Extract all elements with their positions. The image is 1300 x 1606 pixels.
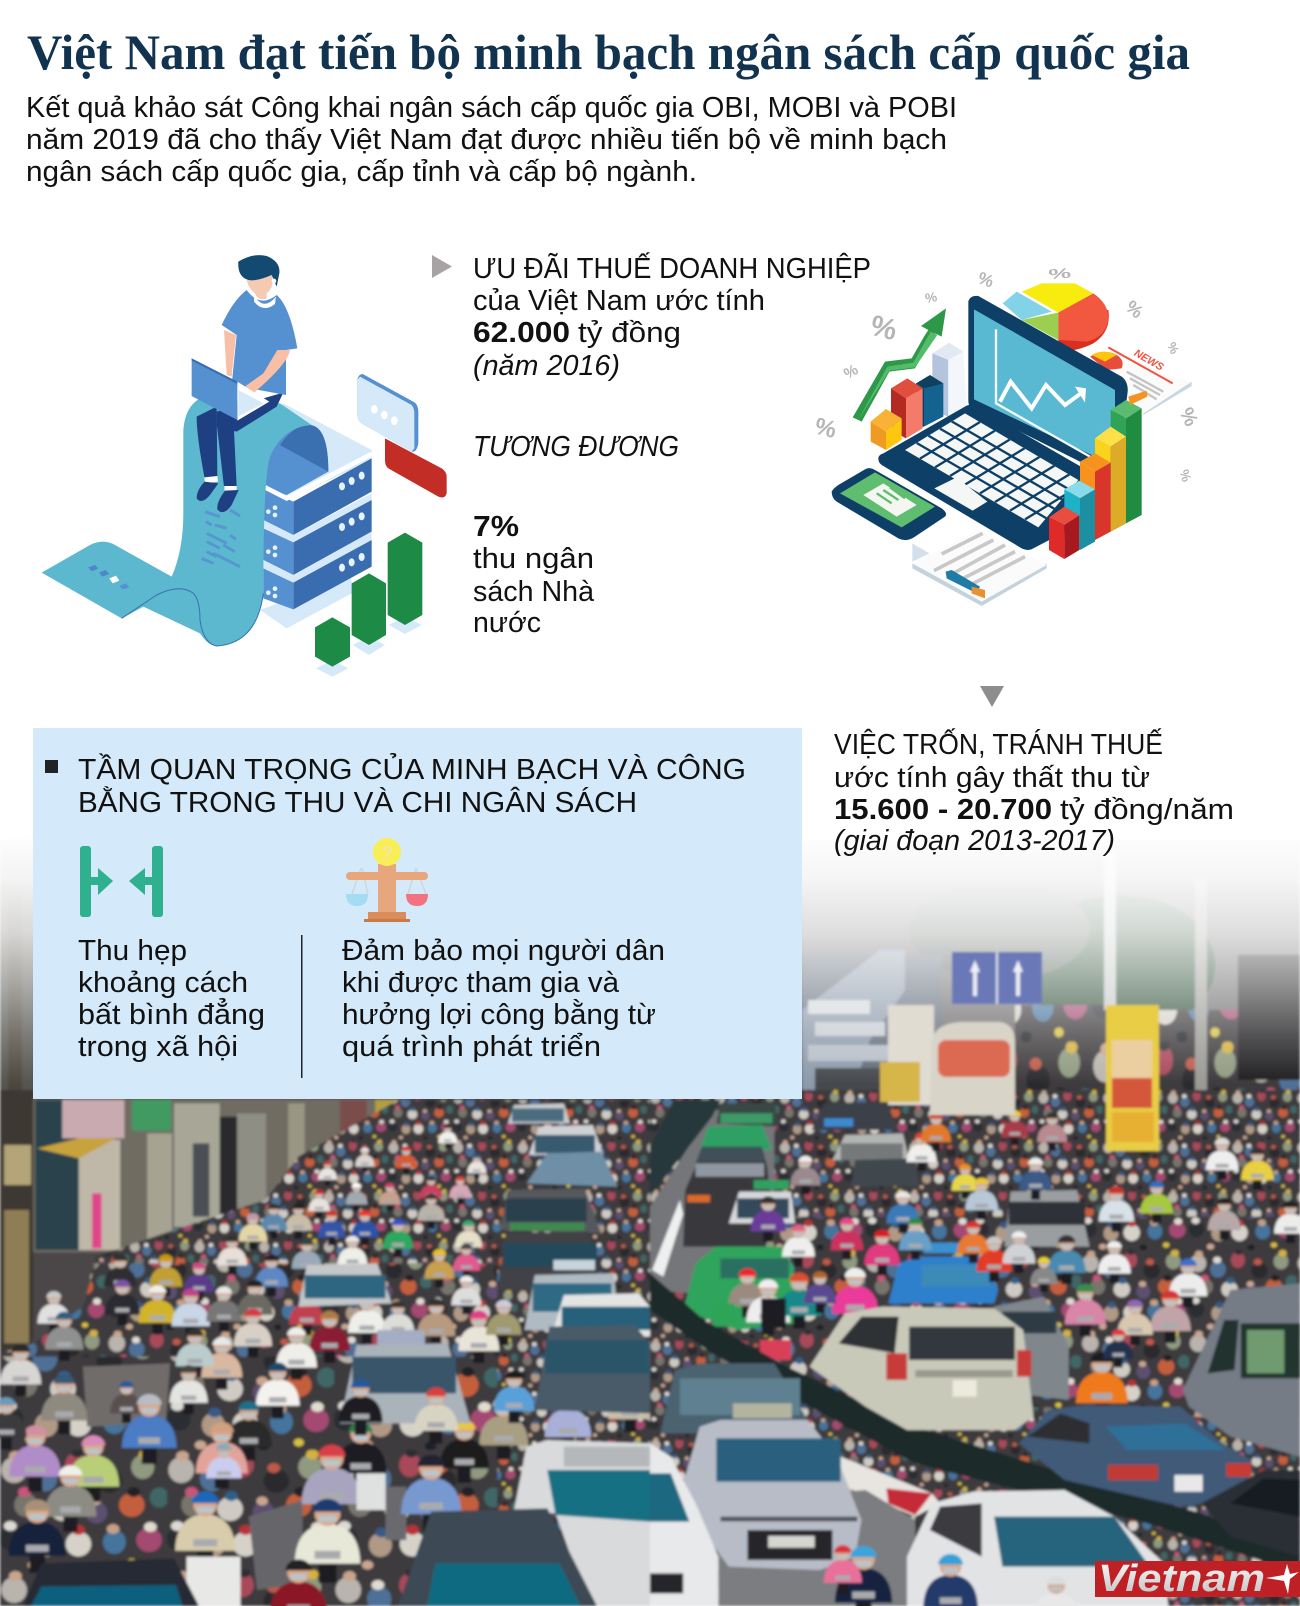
- text: fair participation: hưởng lợi công bằng từ: [342, 998, 656, 1031]
- text: fair participation: Đảm bảo mọi người dân: [342, 935, 665, 967]
- bars in front: [1049, 391, 1147, 559]
- pie chart and newspaper: [1003, 283, 1192, 415]
- paper roll: [42, 398, 312, 646]
- text block: corporate tax incentives: ƯU ĐÃI THUẾ DOANH NGHIỆP: [473, 251, 871, 285]
- percent signs: %: [867, 309, 900, 347]
- panel heading: BẰNG TRONG THU VÀ CHI NGÂN SÁCH: [78, 785, 637, 819]
- illustration: person with laptop on server: [42, 255, 447, 677]
- text block: corporate tax incentives: [473, 251, 871, 639]
- text block: corporate tax incentives: (năm 2016): [473, 350, 620, 382]
- person: [192, 255, 297, 512]
- cars near right half: [650, 1283, 1300, 1606]
- text: fair participation: khi được tham gia và: [342, 967, 620, 999]
- text: reduce inequality: [78, 935, 265, 1063]
- growth arrow: [853, 308, 946, 422]
- intro text: năm 2019 đã cho thấy Việt Nam đạt được nhiều tiến bộ về minh bạch: [26, 124, 947, 156]
- percent signs: %: [1122, 296, 1148, 322]
- background photo: street traffic: [0, 830, 1300, 1606]
- small bars behind laptop: [871, 343, 967, 450]
- fence: [650, 1273, 1300, 1573]
- arrow: right-pointing gray triangle: [432, 255, 452, 278]
- text: fair participation: quá trình phát triển: [342, 1031, 601, 1063]
- text block: tax evasion: tỷ đồng/năm: [1060, 794, 1234, 826]
- panel heading: TẦM QUAN TRỌNG CỦA MINH BẠCH VÀ CÔNG: [78, 752, 746, 786]
- text block: corporate tax incentives: 62.000: [473, 317, 570, 349]
- panel heading: [45, 752, 746, 819]
- icon: balance scale with question: ?: [381, 843, 393, 865]
- road sign with arrows: [952, 952, 1042, 1004]
- bus: [880, 1005, 1015, 1115]
- text: fair participation: [342, 935, 665, 1063]
- laptop: [878, 296, 1128, 550]
- illustration: laptop with charts: [812, 264, 1202, 606]
- text block: corporate tax incentives: nước: [473, 607, 541, 639]
- logo: Vietnam+: Vietnam: [1098, 1558, 1265, 1600]
- icon: balance scale with question: [346, 838, 428, 922]
- percent signs: %: [1164, 340, 1182, 356]
- riders right half: [712, 1110, 1300, 1418]
- percent signs: %: [1175, 405, 1202, 430]
- percent signs: %: [841, 361, 862, 383]
- text block: tax evasion: VIỆC TRỐN, TRÁNH THUẾ: [834, 727, 1163, 761]
- text block: corporate tax incentives: sách Nhà: [473, 576, 595, 608]
- arrow: down-pointing gray triangle: [980, 686, 1004, 707]
- text block: tax evasion: ước tính gây thất thu từ: [834, 762, 1150, 794]
- percent signs: %: [1048, 264, 1073, 282]
- riders near: [0, 1280, 652, 1606]
- document and pen: [912, 530, 1047, 606]
- yellow poster: [1106, 1005, 1159, 1151]
- text block: corporate tax incentives: TƯƠNG ĐƯƠNG: [473, 431, 679, 463]
- text block: corporate tax incentives: của Việt Nam ước tính: [473, 285, 765, 317]
- text block: corporate tax incentives: 7%: [473, 511, 519, 543]
- percent signs: %: [975, 267, 997, 292]
- text block: tax evasion: [834, 727, 1234, 857]
- text: reduce inequality: khoảng cách: [78, 967, 248, 999]
- text: reduce inequality: Thu hẹp: [78, 935, 187, 967]
- pie chart and newspaper: NEWS: [1132, 347, 1166, 374]
- photo right half: [650, 1090, 1300, 1606]
- percent signs: %: [812, 413, 839, 444]
- title: Việt Nam đạt tiến bộ minh bạch ngân sách cấp quốc gia: [27, 24, 1190, 80]
- text: reduce inequality: bất bình đẳng: [78, 997, 265, 1031]
- text block: corporate tax incentives: thu ngân: [473, 543, 594, 575]
- green bars: [315, 533, 422, 677]
- cars left half: [23, 1103, 650, 1606]
- intro text: Kết quả khảo sát Công khai ngân sách cấp quốc gia OBI, MOBI và POBI: [26, 92, 957, 124]
- text: reduce inequality: trong xã hội: [78, 1031, 238, 1063]
- fog gradient over top of photo: [0, 830, 1300, 1085]
- server stack: [263, 454, 372, 609]
- chat bubbles: [357, 374, 447, 497]
- text block: tax evasion: 15.600 - 20.700: [834, 794, 1052, 826]
- distant street scene: [0, 840, 1300, 1110]
- percent signs: %: [1176, 468, 1194, 484]
- text block: tax evasion: (giai đoạn 2013-2017): [834, 825, 1115, 857]
- riders far: [104, 1124, 486, 1314]
- phone: [832, 468, 946, 540]
- cars far right half: [683, 1102, 1089, 1330]
- photo left half: [0, 1090, 652, 1606]
- panel: importance of transparency: [33, 728, 802, 1099]
- text block: corporate tax incentives: tỷ đồng: [578, 317, 681, 349]
- intro text: ngân sách cấp quốc gia, cấp tỉnh và cấp bộ ngành.: [26, 156, 697, 188]
- icon: narrowing gap arrows: [80, 846, 163, 917]
- percent signs: %: [924, 289, 938, 306]
- percent signs: [812, 264, 1202, 484]
- intro text: [26, 92, 957, 188]
